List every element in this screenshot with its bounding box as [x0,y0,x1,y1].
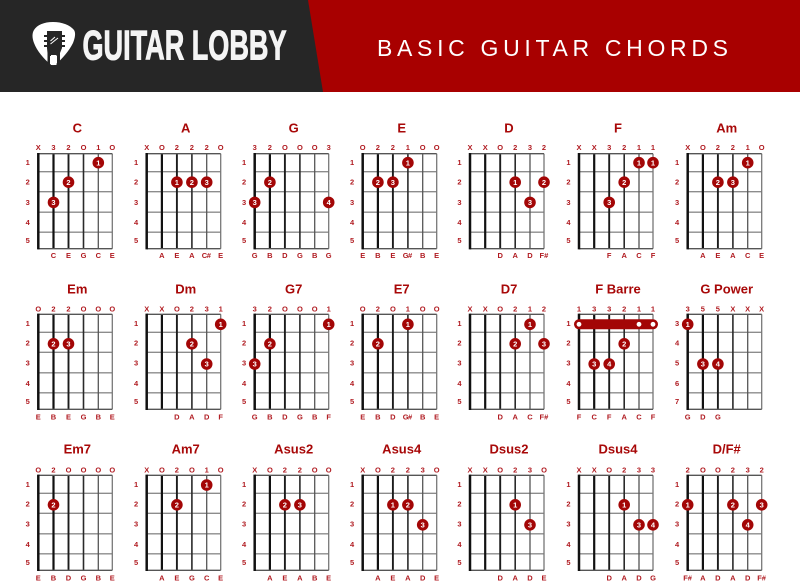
fret numbers: 12345 [566,319,571,406]
finger dots: 2 [190,339,194,348]
finger dots: 3 [66,339,71,348]
finger dots [171,479,212,511]
finger dots: 1 [175,178,179,187]
finger dots: 3 [607,198,611,207]
note names: GBDGBG [252,251,332,260]
open and muted string markers: XO22OO [252,465,332,474]
note names: DACF# [497,412,549,421]
finger dots: 3 [51,198,56,207]
fretboard grid [363,314,437,410]
open and muted string markers: X32O1O [36,143,115,152]
chord name: G [289,121,299,136]
fret numbers: 12345 [242,158,247,245]
finger dots: 2 [175,500,179,509]
open and muted string markers: 355XXX [686,304,764,313]
finger dots: 2 [406,500,410,509]
fret numbers: 12345 [457,480,462,567]
finger dots: 4 [607,360,612,369]
fret numbers: 12345 [134,480,139,567]
barre bar [574,319,658,329]
finger dots [372,318,414,350]
finger dots: 4 [651,520,656,529]
finger dots: 3 [205,178,209,187]
fretboard grid [147,153,221,249]
chord: G7 [242,281,334,421]
finger dots: 3 [542,339,546,348]
fret numbers: 34567 [675,319,680,406]
chord: Am [675,121,765,260]
header: red title panel [308,0,800,92]
finger dots: 1 [96,158,100,167]
fretboard grid [688,153,762,249]
note names: DADG [606,573,656,582]
finger dots [249,176,334,208]
fretboard grid [688,475,762,571]
finger dots: 2 [268,339,272,348]
chord name: Asus4 [382,441,422,456]
finger dots [48,499,59,511]
finger dots: 2 [51,500,56,509]
fret numbers: 12345 [26,158,31,245]
chord name: D7 [501,281,517,296]
finger dots: 2 [376,339,380,348]
finger dots: 4 [716,360,721,369]
note names: F#ADADF# [683,573,767,582]
finger dots [372,157,414,188]
fret numbers: 12345 [457,319,462,406]
finger dots: 3 [528,198,532,207]
chord name: C [73,121,83,136]
chord: Am7 [134,441,224,582]
finger dots [618,499,659,531]
open and muted string markers: O2OOOO [35,465,115,474]
open and muted string markers: XO222O [144,143,224,152]
finger dots: 2 [190,178,194,187]
note names: AEADE [375,573,439,582]
logo wordmark: GUITAR LOBBY [82,22,286,68]
finger dots: 3 [253,198,257,207]
finger dots: 2 [268,178,272,187]
open and muted string markers: 2OO232 [686,465,764,474]
fret numbers: 12345 [26,319,31,406]
finger dots: 2 [622,339,626,348]
finger dots: 1 [205,481,209,490]
finger dots: 1 [637,158,641,167]
fret numbers: 12345 [134,319,139,406]
open and muted string markers: XXO212 [467,304,546,313]
finger dots [249,318,334,370]
chord name: Dsus4 [598,441,638,456]
finger dots: 2 [283,500,287,509]
open and muted string markers: XO221O [685,143,765,152]
finger dots: 3 [391,178,395,187]
open and muted string markers: XXO231 [144,304,223,313]
chord name: F Barre [595,281,641,296]
finger dots: 3 [528,520,532,529]
chord name: F [614,121,622,136]
fret numbers: 12345 [242,480,247,567]
fretboard grid [147,475,221,571]
open and muted string markers: XXO233 [576,465,655,474]
fretboard grid [579,153,653,249]
fret numbers: 12345 [457,158,462,245]
chord name: E [397,121,406,136]
finger dots: 3 [760,500,764,509]
open and muted string markers: XXO232 [467,143,546,152]
finger dots: 1 [406,320,410,329]
fretboard grid [255,475,329,571]
finger dots: 1 [513,178,517,187]
fretboard grid [470,314,544,410]
chord name: D/F# [713,441,742,456]
chord name: A [181,121,191,136]
fretboard grid [363,153,437,249]
finger dots: 1 [686,500,690,509]
finger dots: 4 [746,520,751,529]
chord: F [566,121,659,260]
fretboard grid [38,314,112,410]
finger dots: 3 [205,360,209,369]
fretboard grid [688,314,762,410]
fretboard grid [470,475,544,571]
finger dots [509,499,536,531]
finger dots: 1 [746,158,750,167]
finger dots [712,157,754,188]
open and muted string markers: O2O1OO [360,304,440,313]
chord name: Em [67,281,87,296]
finger dots: 3 [421,520,425,529]
finger dots: 3 [298,500,302,509]
finger dots [682,499,768,531]
finger dots: 2 [51,339,56,348]
open and muted string markers: 133211 [577,304,655,313]
finger dots: 1 [406,158,410,167]
finger dots: 1 [219,320,223,329]
fret numbers: 12345 [350,319,355,406]
icon: guitar pick with headstock [32,22,75,65]
note names: FCFACF [577,412,656,421]
finger dots: 1 [651,158,655,167]
fretboard grid [38,475,112,571]
chord name: Em7 [64,441,91,456]
chord name: Am7 [172,441,200,456]
finger dots [588,338,630,370]
fret numbers: 12345 [350,480,355,567]
chord: E7 [350,281,440,421]
fretboard grid [147,314,221,410]
note names: AEAC#E [159,251,223,260]
open and muted string markers: XX3211 [576,143,655,152]
note names: AEGCE [159,573,223,582]
chord name: Dm [175,281,196,296]
finger dots [682,318,724,370]
finger dots [171,176,212,188]
chord: D [457,121,550,260]
note names: CEGCE [51,251,115,260]
chord: Dsus4 [566,441,659,582]
finger dots [387,499,428,531]
finger dots: 2 [66,178,71,187]
chord: Em7 [26,441,115,582]
chord: F Barre [566,281,658,421]
fretboard grid [255,314,329,410]
finger dots [48,338,74,350]
fret numbers: 12345 [566,480,571,567]
chord: C [26,121,115,260]
fretboard grid [255,153,329,249]
finger dots [603,157,659,208]
open and muted string markers: O221OO [360,143,440,152]
chord name: Asus2 [274,441,313,456]
finger dots [279,499,306,511]
open and muted string markers: 32OOO1 [253,304,331,313]
note names: EBEGBE [36,412,115,421]
open and muted string markers: O22OOO [35,304,115,313]
chord name: Dsus2 [489,441,529,456]
finger dots [509,318,550,350]
chord: A [134,121,224,260]
note names: AEACE [700,251,764,260]
note names: EBDGBE [36,573,115,582]
main title: BASIC GUITAR CHORDS [377,35,728,61]
chord: Asus4 [350,441,440,582]
finger dots: 3 [731,178,735,187]
fretboard grid [579,475,653,571]
open and muted string markers: XXO23O [467,465,547,474]
chord: Asus2 [242,441,332,582]
fret numbers: 12345 [675,158,680,245]
fret numbers: 12345 [26,480,31,567]
finger dots: 1 [391,500,395,509]
note names: EBDG#BE [360,412,439,421]
note names: DADF [174,412,223,421]
fretboard grid [470,153,544,249]
chord: G [242,121,334,260]
open and muted string markers: XO2O1O [144,465,224,474]
fret numbers: 12345 [350,158,355,245]
chord: Em [26,281,115,421]
chord name: G7 [285,281,302,296]
finger dots: 3 [637,520,641,529]
note names: AEABE [267,573,331,582]
fret numbers: 12345 [566,158,571,245]
chord name: Am [716,121,737,136]
finger dots: 2 [542,178,546,187]
note names: DADF# [497,251,549,260]
note names: EBEG#BE [360,251,439,260]
fret numbers: 12345 [242,319,247,406]
chord name: D [504,121,514,136]
open and muted string markers: XO223O [360,465,440,474]
fret numbers: 12345 [675,480,680,567]
chord: E [350,121,440,260]
chord: Dsus2 [457,441,547,582]
fretboard grid [579,314,653,410]
fret numbers: 12345 [134,158,139,245]
note names: DADE [497,573,547,582]
finger dots [186,318,226,370]
chord: Dm [134,281,226,421]
note names: GDG [685,412,721,421]
finger dots: 1 [513,500,517,509]
finger dots: 1 [327,320,331,329]
header: dark logo panel [0,0,330,92]
finger dots: 1 [622,500,626,509]
finger dots: 3 [701,360,705,369]
chord: G Power [675,281,764,421]
finger dots: 3 [253,360,257,369]
finger dots: 4 [327,198,332,207]
chord name: G Power [700,281,753,296]
finger dots: 2 [731,500,735,509]
finger dots: 2 [622,178,626,187]
finger dots: 2 [513,339,517,348]
chord: D7 [457,281,550,421]
chord: D/F# [675,441,768,582]
open and muted string markers: 32OOO3 [253,143,331,152]
finger dots: 1 [686,320,690,329]
note names: GBDGBF [252,412,331,421]
finger dots: 2 [376,178,380,187]
header band [0,0,800,92]
fretboard grid [363,475,437,571]
finger dots [509,176,550,208]
finger dots: 3 [592,360,596,369]
fretboard grid [38,153,112,249]
note names: FACF [607,251,656,260]
finger dots [48,157,104,208]
finger dots: 2 [716,178,720,187]
finger dots: 1 [528,320,532,329]
chord name: E7 [394,281,410,296]
